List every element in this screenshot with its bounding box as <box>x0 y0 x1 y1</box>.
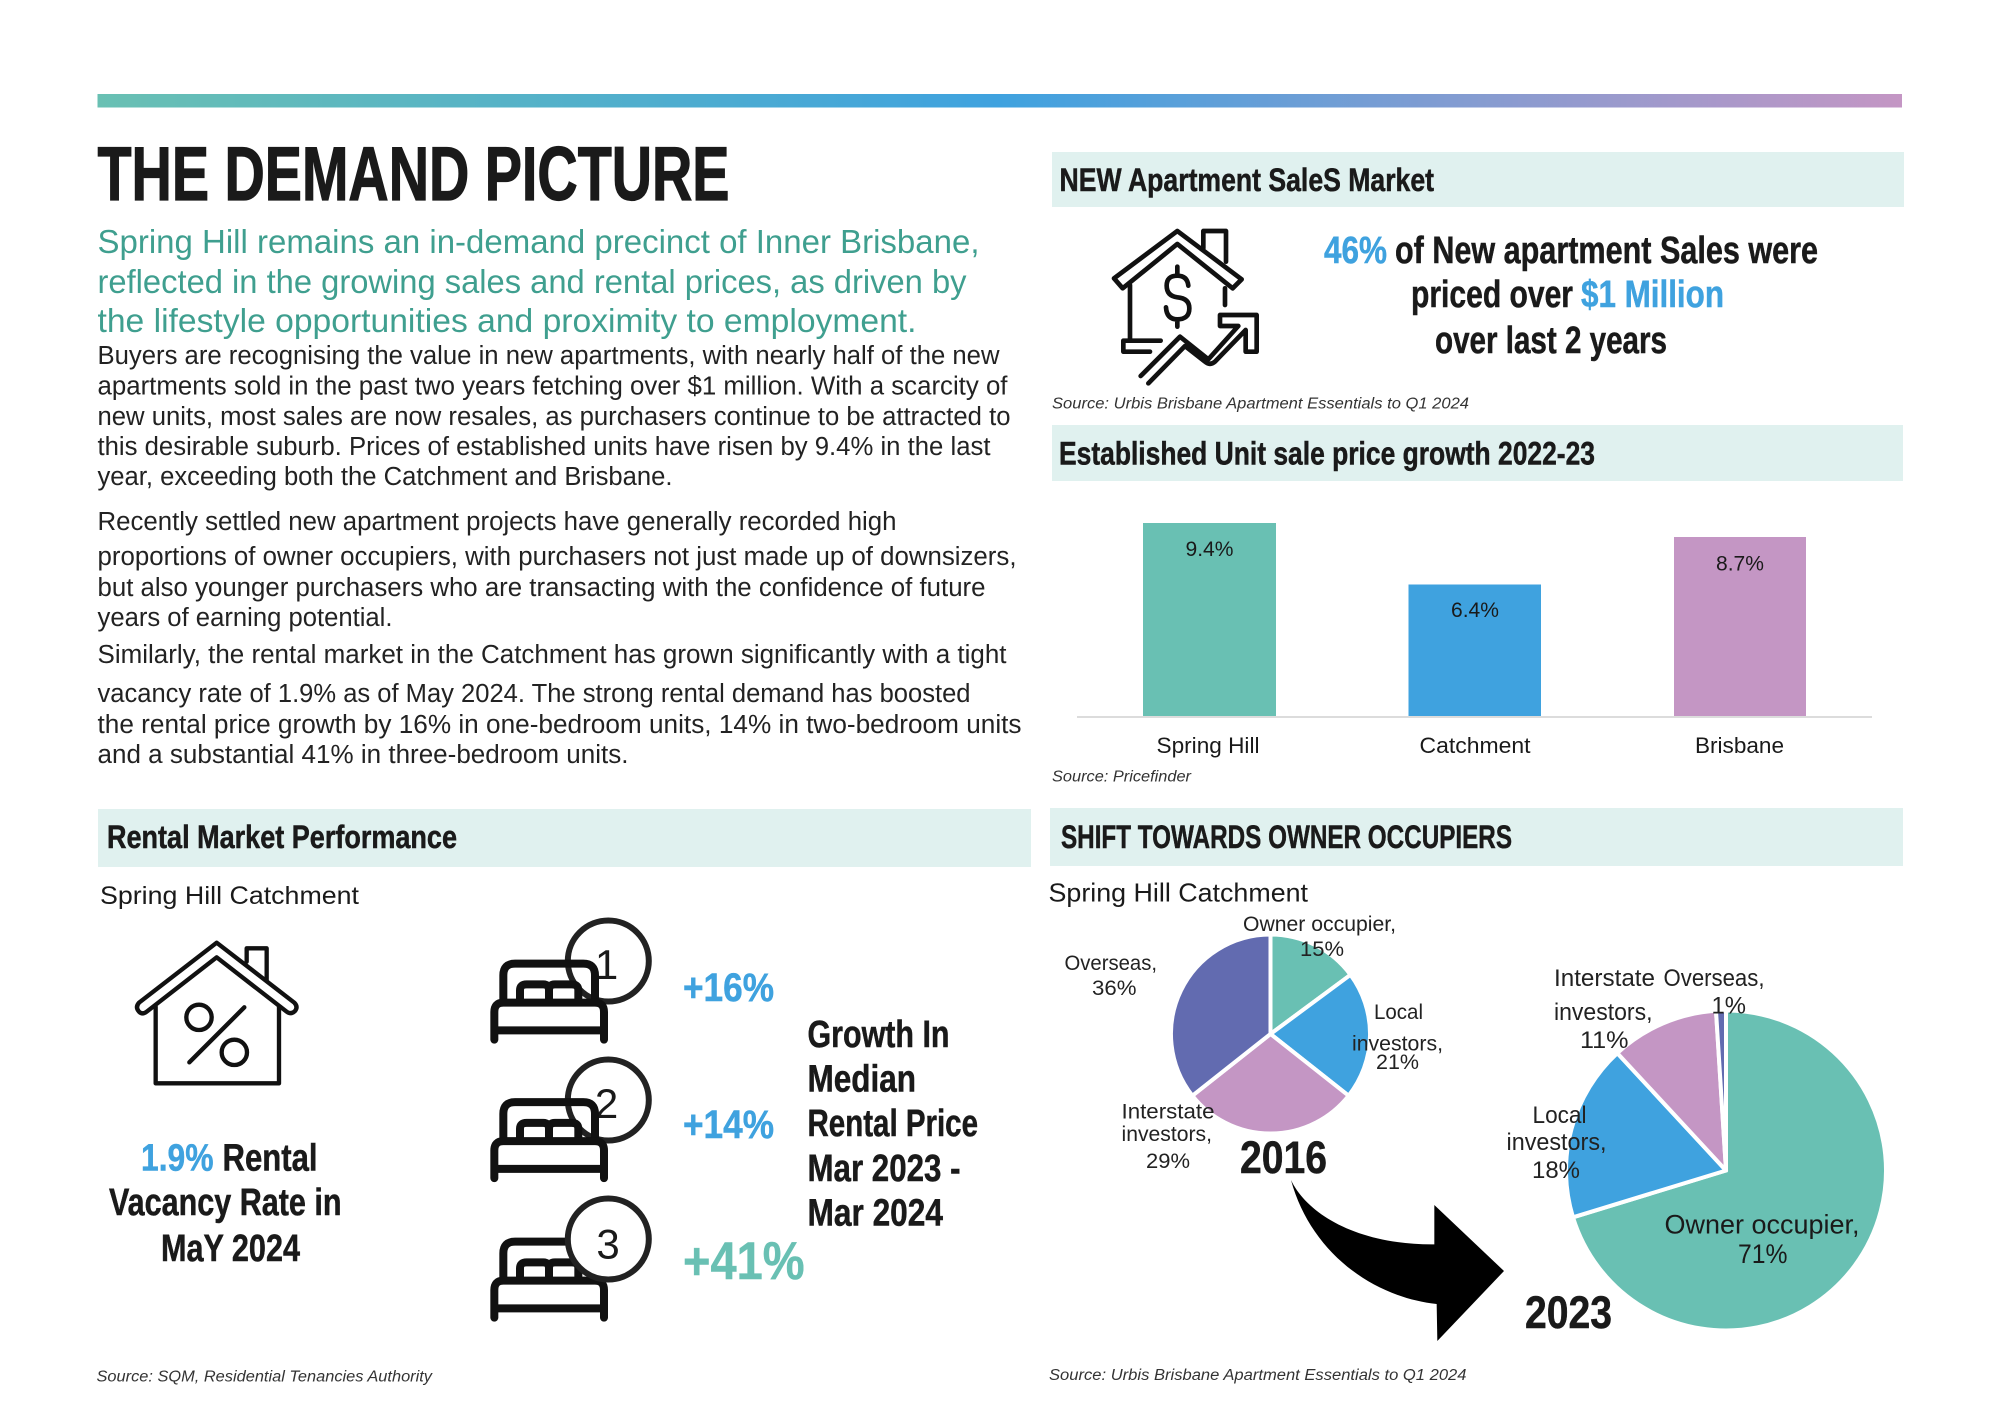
body text: owner occupier paragraph <box>98 508 1017 632</box>
source note: Source: Urbis Brisbane Apartment Essentials to Q1 2024 <box>1049 1367 1467 1384</box>
label: growth in median rental price: Growth In <box>808 1014 950 1056</box>
body text: owner occupier paragraph: but also younger purchasers who are transacting with the confidence of future <box>98 574 986 602</box>
body text: buyers paragraph: year, exceeding both the Catchment and Brisbane. <box>98 463 672 491</box>
bar chart <box>1077 523 1872 758</box>
bar: Brisbane: Brisbane <box>1695 733 1784 758</box>
pie chart: 2023: investors, <box>1554 999 1652 1026</box>
label: growth in median rental price: Mar 2023 - <box>808 1148 960 1190</box>
pie chart: 2023: 71% <box>1738 1239 1788 1269</box>
body text: buyers paragraph: Buyers are recognising the value in new apartments, with nearly half of the new <box>98 342 1000 370</box>
icon: two-bedroom bed: 2 <box>595 1080 618 1127</box>
icon: one-bedroom bed <box>494 920 649 1040</box>
callout: vacancy rate: 1.9% <box>141 1138 214 1180</box>
pie chart: 2023: investors, <box>1506 1129 1606 1156</box>
heading: rental market performance: Rental Market Performance <box>107 819 457 855</box>
body text: rental paragraph: and a substantial 41% in three-bedroom units. <box>98 741 628 769</box>
icon: one-bedroom bed: 1 <box>595 941 618 988</box>
bar: Spring Hill: 9.4% <box>1186 538 1234 561</box>
label: 2023: 2023 <box>1525 1287 1612 1338</box>
callout: vacancy rate: Vacancy Rate in <box>109 1182 342 1224</box>
heading: new apartment sales market <box>1052 152 1904 207</box>
callout: 46 percent priced over 1 million: $1 Million <box>1581 274 1724 316</box>
callout: vacancy rate <box>109 1138 342 1270</box>
icon: three-bedroom bed <box>494 1198 649 1318</box>
pie chart: 2023 <box>1506 965 1886 1331</box>
body text: owner occupier paragraph: proportions of owner occupiers, with purchasers not just made up of downsizers, <box>98 543 1017 571</box>
subheading: Spring Hill Catchment: Spring Hill Catchment <box>1048 878 1309 908</box>
source note: Source: SQM, Residential Tenancies Authority <box>96 1368 433 1386</box>
panel: new apartment sales market <box>1052 152 1904 412</box>
pie chart: 2023: Interstate <box>1554 965 1655 992</box>
label: growth in median rental price <box>808 1014 978 1234</box>
lead paragraph: Spring Hill remains an in-demand precinct of Inner Brisbane, <box>98 223 980 260</box>
pie chart: 2016: 21% <box>1376 1051 1419 1074</box>
title: THE DEMAND PICTURE <box>98 132 730 217</box>
pie chart: 2016: Owner occupier, <box>1243 913 1396 936</box>
pie chart: 2023: Overseas, <box>1664 965 1764 992</box>
callout: 46 percent priced over 1 million: 46% <box>1324 230 1387 272</box>
bar: Catchment: Catchment <box>1420 733 1530 758</box>
icon: two-bedroom bed <box>494 1060 649 1178</box>
body text: buyers paragraph: this desirable suburb. Prices of established units have risen by 9.4% in the last <box>98 433 990 461</box>
body text: rental paragraph: the rental price growth by 16% in one-bedroom units, 14% in two-bedroom units <box>98 711 1022 739</box>
body text: rental paragraph: vacancy rate of 1.9% as of May 2024. The strong rental demand has boosted <box>98 680 970 708</box>
body text: rental paragraph: Similarly, the rental market in the Catchment has grown significantly with a tight <box>98 641 1006 669</box>
callout: vacancy rate: MaY 2024 <box>161 1228 300 1270</box>
growth figures <box>683 966 804 1291</box>
callout: 46 percent priced over 1 million <box>1324 230 1818 362</box>
pie chart: 2016: investors, <box>1352 1032 1443 1056</box>
label: growth in median rental price: Mar 2024 <box>808 1192 943 1234</box>
body text: buyers paragraph: new units, most sales are now resales, as purchasers continue to be attracted to <box>98 403 1010 431</box>
growth figures: +41% <box>683 1232 804 1291</box>
panel: established unit sale price growth <box>1052 425 1903 786</box>
source note: Source: Pricefinder <box>1052 768 1192 786</box>
bar: Spring Hill <box>1143 523 1276 758</box>
subheading: Spring Hill Catchment: Spring Hill Catchment <box>100 882 359 910</box>
callout: 46 percent priced over 1 million: over last 2 years <box>1435 320 1667 362</box>
body text: buyers paragraph <box>98 342 1010 491</box>
heading: rental market performance <box>98 809 1031 867</box>
pie chart: 2023: Owner occupier, <box>1664 1210 1860 1240</box>
pie chart: 2023: 11% <box>1580 1027 1628 1054</box>
pie chart: 2016 <box>1064 913 1443 1173</box>
label: 2016: 2016 <box>1240 1132 1327 1183</box>
label: growth in median rental price: Rental Price <box>808 1103 978 1145</box>
heading: shift towards owner occupiers: SHIFT TOWARDS OWNER OCCUPIERS <box>1061 819 1512 855</box>
pie chart: 2023: Local <box>1532 1102 1586 1129</box>
body text: owner occupier paragraph: Recently settled new apartment projects have generally recorded high <box>98 508 897 536</box>
lead paragraph: the lifestyle opportunities and proximity to employment. <box>98 302 916 339</box>
bar: Catchment: 6.4% <box>1451 599 1499 622</box>
body text: owner occupier paragraph: years of earning potential. <box>98 604 392 632</box>
pie chart: 2016: 36% <box>1092 977 1136 1000</box>
source note: Source: Urbis Brisbane Apartment Essentials to Q1 2024 <box>1052 396 1469 412</box>
growth figures: +14% <box>683 1103 774 1147</box>
panel: shift towards owner occupiers <box>1048 808 1903 1384</box>
heading: shift towards owner occupiers <box>1050 808 1903 866</box>
growth figures: +16% <box>683 966 774 1010</box>
bar: Brisbane <box>1674 537 1806 758</box>
lead paragraph: reflected in the growing sales and rental prices, as driven by <box>98 263 967 300</box>
pie chart: 2023: 1% <box>1712 992 1746 1020</box>
bar: Catchment <box>1408 584 1541 758</box>
pie chart: 2016: Overseas, <box>1064 952 1157 975</box>
icon: house with percent <box>137 943 297 1083</box>
callout: vacancy rate: Rental <box>222 1138 318 1180</box>
pie chart: 2016: Interstate <box>1122 1100 1214 1124</box>
heading: established unit sale price growth: Established Unit sale price growth 2022-23 <box>1059 436 1595 472</box>
pie chart: 2016: 15% <box>1300 938 1344 961</box>
panel: rental market performance <box>96 809 1031 1386</box>
heading: new apartment sales market: NEW Apartment SaleS Market <box>1060 162 1434 198</box>
bar: Brisbane: 8.7% <box>1716 552 1764 576</box>
label: growth in median rental price: Median <box>808 1058 916 1100</box>
lead paragraph <box>98 223 980 339</box>
pie chart: 2016: Local <box>1374 1001 1423 1024</box>
bar: Spring Hill: Spring Hill <box>1156 733 1260 758</box>
callout: 46 percent priced over 1 million: priced over <box>1411 274 1573 316</box>
callout: 46 percent priced over 1 million: of New apartment Sales were <box>1395 230 1818 272</box>
body text: rental paragraph <box>98 641 1022 769</box>
icon: three-bedroom bed: 3 <box>596 1220 620 1268</box>
heading: established unit sale price growth <box>1052 425 1903 481</box>
arrow <box>1291 1180 1504 1341</box>
pie chart: 2016: 29% <box>1146 1150 1190 1173</box>
body text: buyers paragraph: apartments sold in the past two years fetching over $1 million. With a scarcity of <box>98 372 1008 400</box>
pie chart: 2016: investors, <box>1122 1123 1212 1146</box>
pie chart: 2023: 18% <box>1532 1157 1580 1184</box>
icon: house with dollar and rising arrow <box>1114 231 1257 383</box>
top gradient bar <box>98 94 1902 108</box>
